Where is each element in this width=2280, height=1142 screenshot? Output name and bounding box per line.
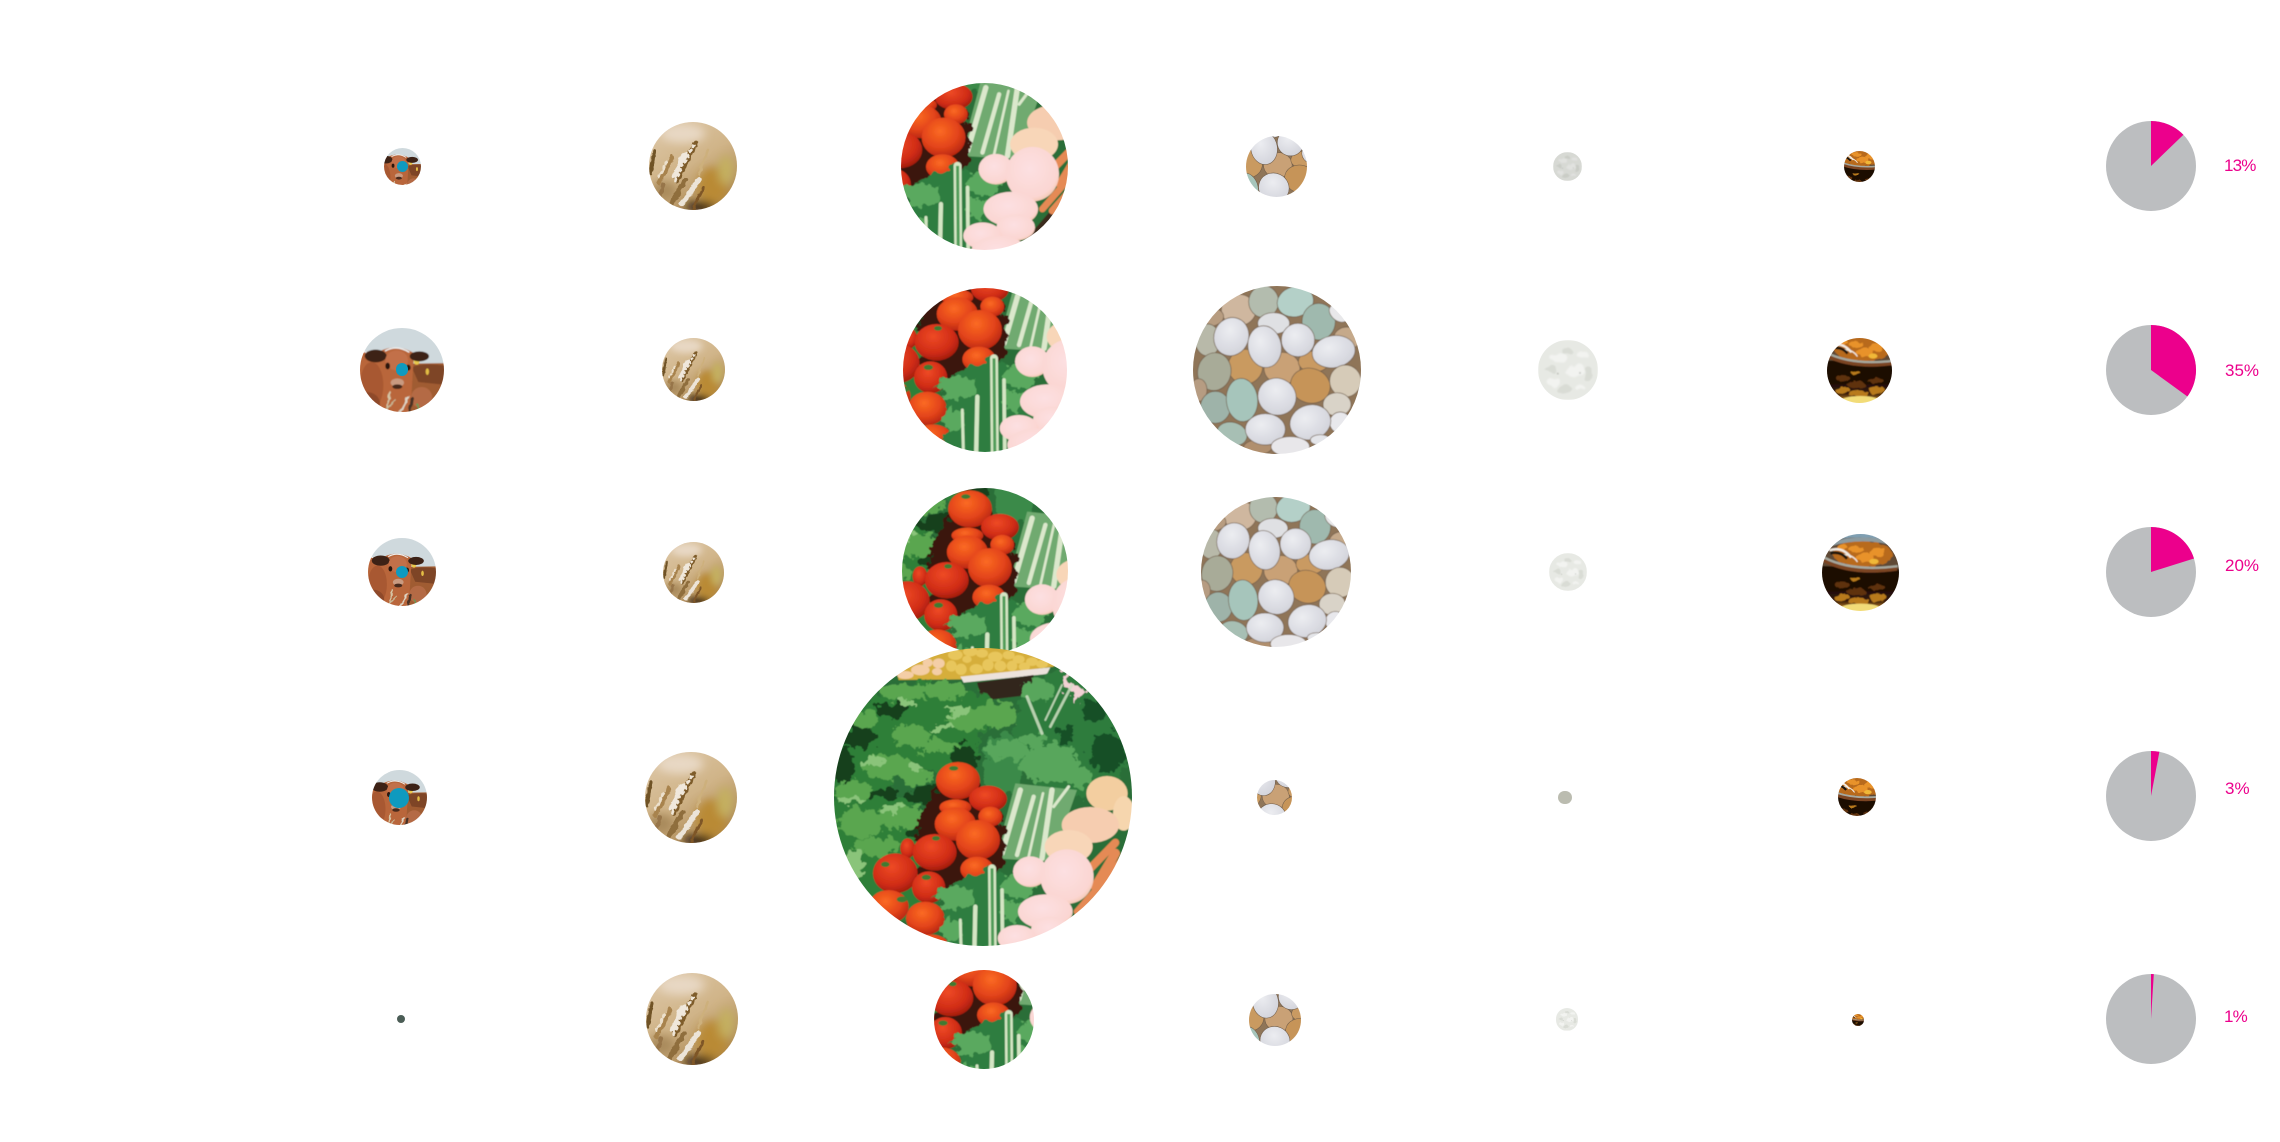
icon: beverage photo, row 5 <box>1852 1014 1864 1026</box>
icon: grain photo, row 3 <box>663 542 724 603</box>
icon: vegetables photo, row 1 <box>901 83 1068 250</box>
icon: eggs photo, row 5 <box>1249 994 1301 1046</box>
icon: vegetables photo, row 3 <box>902 488 1068 650</box>
icon: sugar photo, row 4 <box>1558 791 1572 804</box>
label: 1%: 1% <box>2224 1007 2247 1026</box>
icon: grain photo, row 4 <box>645 752 737 843</box>
icon: grain photo, row 2 <box>662 338 725 401</box>
pie chart: 1% <box>2106 974 2196 1064</box>
icon: beef photo, row 3 <box>368 538 436 606</box>
icon: beef photo, row 1 <box>384 148 421 185</box>
icon: beverage photo, row 4 <box>1838 778 1876 816</box>
icon: grain photo, row 1 <box>649 122 737 210</box>
label: 3%: 3% <box>2225 779 2250 798</box>
icon: eggs photo, row 4 <box>1257 780 1292 815</box>
icon: sugar photo, row 5 <box>1556 1008 1578 1030</box>
icon: eggs photo, row 1 <box>1246 136 1307 197</box>
icon: sugar photo, row 2 <box>1538 340 1598 400</box>
icon: beef photo, row 4 <box>372 770 427 825</box>
marker: beef dot, row 3 <box>396 566 408 578</box>
icon: beef photo, row 2 <box>360 328 444 412</box>
icon: beverage photo, row 2 <box>1827 338 1892 403</box>
marker: beef dot, row 2 <box>396 363 408 376</box>
label: 20%: 20% <box>2225 556 2259 575</box>
icon: beef photo, row 5 <box>396 1015 404 1023</box>
icon: eggs photo, row 2 <box>1193 286 1361 454</box>
icon: vegetables photo, row 4 <box>834 648 1132 946</box>
marker: beef dot, row 4 <box>389 788 409 808</box>
label: 13%: 13% <box>2224 156 2256 175</box>
label: 35%: 35% <box>2225 361 2259 380</box>
icon: sugar photo, row 1 <box>1553 152 1582 181</box>
pie chart: 13% <box>2106 121 2196 211</box>
icon: beverage photo, row 1 <box>1844 151 1875 182</box>
icon: sugar photo, row 3 <box>1549 553 1587 591</box>
icon: eggs photo, row 3 <box>1201 497 1351 647</box>
icon: vegetables photo, row 5 <box>934 970 1034 1069</box>
pie chart: 20% <box>2106 527 2196 617</box>
icon: beverage photo, row 3 <box>1822 534 1899 611</box>
pie chart: 35% <box>2106 325 2196 415</box>
pie chart: 3% <box>2106 751 2196 841</box>
icon: vegetables photo, row 2 <box>903 288 1067 452</box>
marker: beef dot, row 1 <box>396 160 408 172</box>
icon: grain photo, row 5 <box>646 973 738 1065</box>
